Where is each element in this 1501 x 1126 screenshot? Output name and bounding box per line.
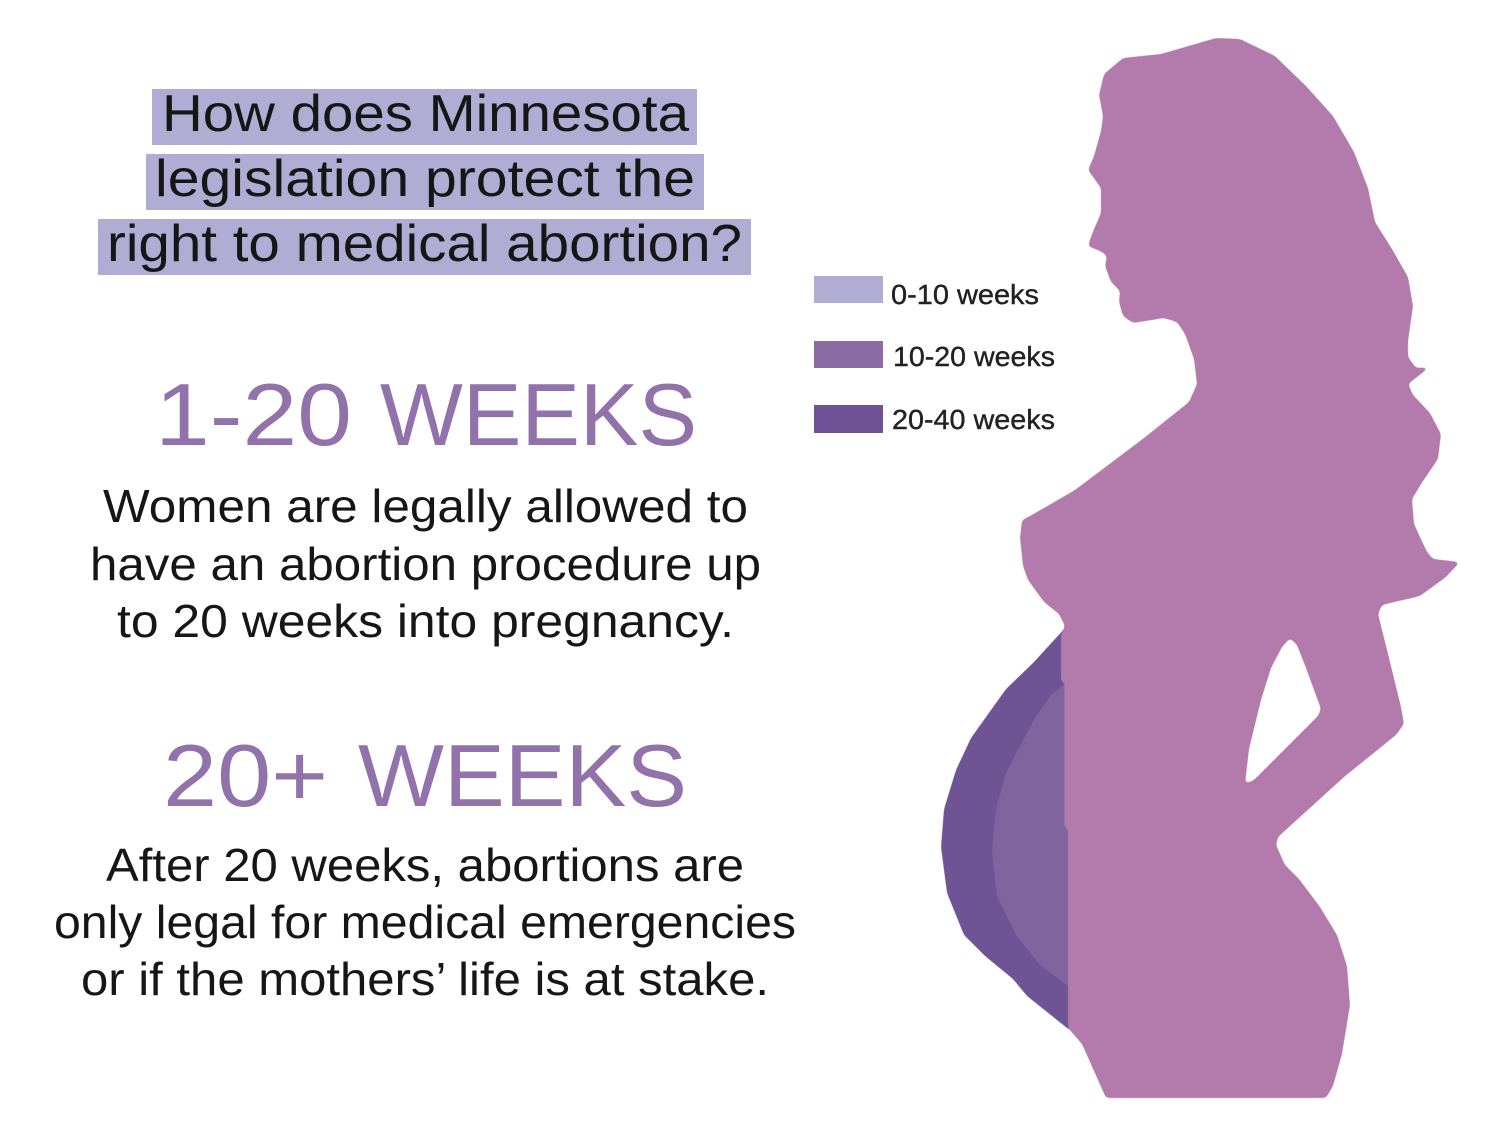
title: right to medical abortion? bbox=[107, 215, 742, 273]
text block: 1-20 weeks: to 20 weeks into pregnancy. bbox=[117, 595, 734, 647]
text block: 1-20 weeks: Women are legally allowed to bbox=[103, 480, 748, 532]
heading: 20+ weeks: WEEKS bbox=[358, 726, 687, 825]
title: How does Minnesota bbox=[162, 85, 689, 143]
text block: 1-20 weeks: have an abortion procedure up bbox=[90, 538, 761, 590]
heading: 20+ weeks: 20+ bbox=[163, 726, 328, 825]
text block: 20+ weeks: only legal for medical emergencies bbox=[54, 896, 796, 948]
legend item: 10-20 weeks bbox=[814, 341, 1055, 372]
legend item: 0-10 weeks: 0-10 weeks bbox=[891, 279, 1039, 310]
heading: 20+ weeks bbox=[163, 726, 687, 825]
legend bbox=[814, 276, 1055, 435]
heading: 1-20 weeks: WEEKS bbox=[380, 365, 697, 464]
belly: 10-20 weeks bbox=[992, 680, 1072, 989]
pregnant woman silhouette bbox=[941, 38, 1460, 1098]
belly: 20-40 weeks bbox=[941, 627, 1072, 1032]
legend item: 20-40 weeks bbox=[814, 404, 1055, 435]
legend item: 20-40 weeks: 20-40 weeks bbox=[892, 404, 1055, 435]
legend item: 0-10 weeks bbox=[814, 276, 1039, 310]
text block: 20+ weeks: or if the mothers’ life is at stake. bbox=[81, 953, 769, 1005]
title bbox=[98, 85, 751, 275]
heading: 1-20 weeks bbox=[155, 365, 697, 464]
body silhouette bbox=[1020, 38, 1460, 1098]
text block: 20+ weeks: After 20 weeks, abortions are bbox=[106, 839, 744, 891]
title: legislation protect the bbox=[155, 150, 695, 208]
text block: 1-20 weeks bbox=[90, 480, 761, 647]
heading: 1-20 weeks: 1-20 bbox=[155, 365, 352, 464]
legend item: 10-20 weeks: 10-20 weeks bbox=[893, 341, 1055, 372]
text block: 20+ weeks bbox=[54, 839, 796, 1005]
